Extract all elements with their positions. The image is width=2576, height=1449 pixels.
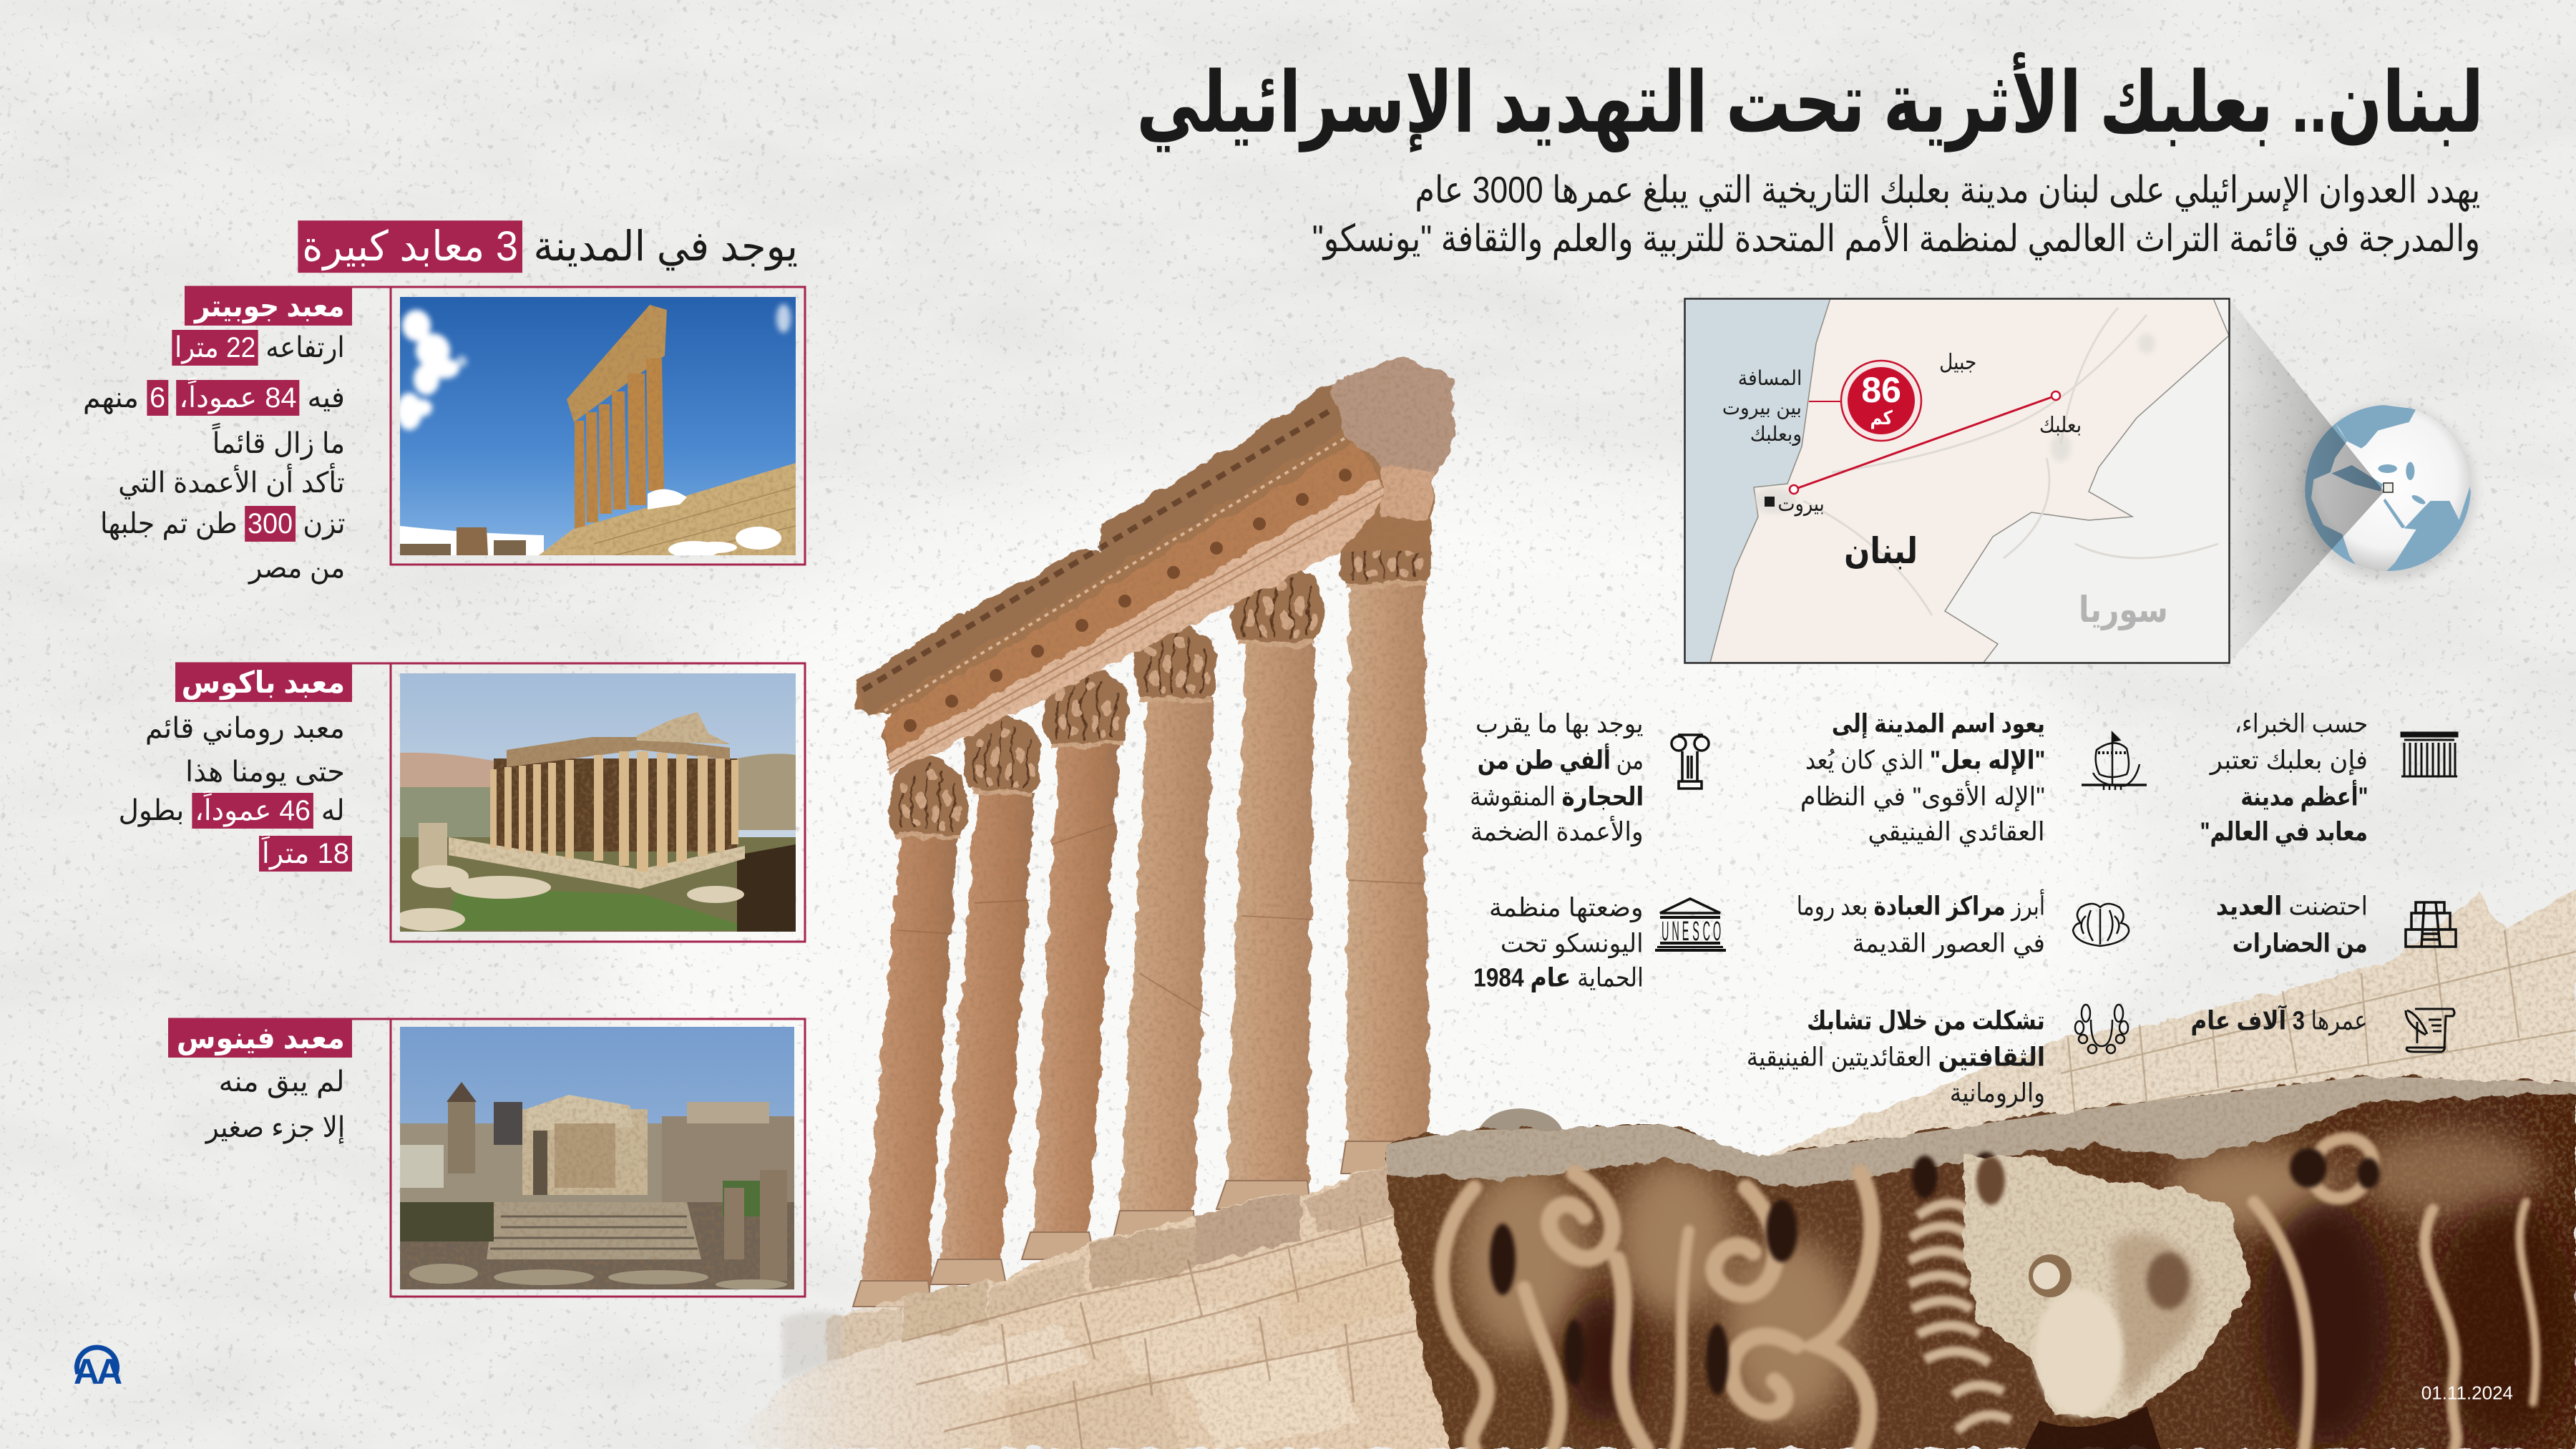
globe — [2229, 298, 2475, 663]
Bacchus text block: معبد روماني قائم — [145, 713, 345, 744]
photo panel: Temple of Bacchus — [175, 663, 805, 942]
Jupiter text block: ارتفاعه 22 مترا — [175, 332, 345, 364]
fact: civilizations — [2204, 887, 2368, 962]
Jupiter text block: فيه 84 عموداً، 6 منهم — [83, 382, 345, 414]
fact: cultures: تشكلت من خلال تشابك — [1807, 1005, 2045, 1035]
photo illustration: columns of the Temple of Jupiter — [716, 356, 2576, 1449]
Bacchus text block: حتى يومنا هذا — [185, 756, 345, 788]
connector cone from map to globe — [2229, 298, 2384, 663]
icon: palmette — [2073, 904, 2129, 946]
Bacchus text block: 18 متراً — [262, 838, 349, 869]
fact: stone weight: يوجد بها ما يقرب — [1475, 708, 1644, 738]
column bases — [853, 1141, 1433, 1307]
subtitle — [1312, 170, 2480, 260]
Venus text block — [168, 1019, 352, 1148]
fact: UNESCO protection: وضعتها منظمة — [1489, 892, 1644, 922]
lion mane — [1909, 1204, 2011, 1431]
icon: ionic column — [1672, 735, 1709, 789]
label: Venus — [168, 1019, 352, 1058]
fact: greatest temples: معابد في العالم" — [2200, 816, 2368, 846]
brand logo: Anadolu Agency: AA — [74, 1352, 122, 1392]
fact: name origin — [1789, 708, 2046, 848]
Jupiter text block: ما زال قائماً — [213, 428, 345, 459]
label: Jupiter — [185, 287, 352, 326]
fact: cultures: والرومانية — [1950, 1078, 2045, 1107]
fact: civilizations: احتضنت العديد — [2216, 891, 2368, 920]
icon: phoenician ship — [2082, 733, 2147, 790]
Jupiter text block: معبد جوبيتر — [195, 289, 345, 323]
fact: greatest temples: فإن بعلبك تعتبر — [2210, 745, 2368, 774]
icon: ziggurat — [2406, 902, 2456, 947]
fact: age: عمرها 3 آلاف عام — [2191, 1005, 2368, 1035]
fact: civilizations: من الحضارات — [2233, 928, 2368, 957]
section heading: three temples: يوجد في المدينة 3 معابد كبيرة — [302, 223, 798, 270]
Venus text block: إلا جزء صغير — [205, 1112, 345, 1143]
Jupiter text block — [86, 287, 352, 591]
fact: cultures — [1739, 1002, 2046, 1113]
icon: temple colonnade — [2401, 733, 2457, 776]
distance badge — [1841, 361, 1921, 441]
subtitle: والمدرجة في قائمة التراث العالمي لمنظمة الأمم المتحدة للتربية والعلم والثقافة "يونسكو" — [1312, 218, 2480, 260]
photo panel: Temple of Jupiter — [185, 287, 805, 565]
icon: wreath — [2075, 1005, 2128, 1053]
capitals — [889, 513, 1432, 839]
map labels: لبنان — [1844, 531, 1918, 571]
fact: center of worship: في العصور القديمة — [1853, 928, 2045, 957]
map labels: المسافة — [1737, 367, 1802, 389]
fact: UNESCO protection: الحماية عام 1984 — [1473, 962, 1644, 992]
carved block with lion head — [1386, 1073, 2576, 1449]
Jupiter text block: من مصر — [249, 552, 345, 584]
fact: greatest temples: حسب الخبراء، — [2235, 708, 2368, 738]
title: لبنان.. بعلبك الأثرية تحت التهديد الإسرائيلي — [1136, 56, 2484, 150]
fact: center of worship — [1789, 887, 2046, 962]
sea — [1684, 298, 1830, 663]
Venus text block: معبد فينوس — [177, 1021, 345, 1055]
fact: center of worship: أبرز مراكز العبادة بعد روما — [1797, 891, 2045, 920]
Venus text block: لم يبق منه — [219, 1066, 345, 1098]
fact: name origin: "الإله الأقوى" في النظام — [1800, 781, 2045, 811]
fact: name origin: "الإله بعل" الذي كان يُعد — [1805, 745, 2045, 774]
icon: UNESCO temple: UNESCO — [1662, 917, 1721, 947]
map labels: كم — [1870, 407, 1893, 429]
fact: UNESCO protection: اليونسكو تحت — [1501, 928, 1644, 957]
map labels: بيروت — [1778, 492, 1825, 516]
fact: name origin: يعود اسم المدينة إلى — [1832, 708, 2045, 738]
fact: stone weight: والأعمدة الضخمة — [1470, 816, 1644, 846]
map labels: وبعلبك — [1750, 423, 1802, 445]
Jupiter text block: تزن 300 طن تم جلبها — [99, 508, 345, 540]
locator map: Lebanon — [1684, 298, 2384, 663]
date: 01.11.2024 — [2421, 1382, 2513, 1403]
back wall of pale blocks — [1746, 887, 2576, 1174]
icon: scroll and quill — [2406, 1009, 2454, 1052]
fact: UNESCO protection — [1460, 887, 1646, 998]
lion head — [1964, 1156, 2250, 1418]
distance line Beirut to Baalbek — [1790, 391, 2060, 494]
map labels: بين بيروت — [1722, 396, 1802, 419]
fact: name origin: العقائدي الفينيقي — [1868, 816, 2045, 846]
map labels — [1684, 298, 2229, 663]
pedestals — [828, 1163, 1410, 1449]
fact: stone weight: الحجارة المنقوشة — [1470, 781, 1644, 811]
map labels: بعلبك — [2039, 414, 2082, 437]
Lebanon territory — [1710, 298, 2229, 663]
fact: stone weight: من ألفي طن من — [1478, 745, 1644, 774]
Bacchus text block: له 46 عموداً، بطول — [119, 795, 345, 826]
map labels: 86 — [1861, 370, 1901, 410]
subtitle: يهدد العدوان الإسرائيلي على لبنان مدينة بعلبك التاريخية التي يبلغ عمرها 3000 عام — [1415, 170, 2480, 211]
stone base wall — [716, 1138, 1503, 1449]
column shafts — [861, 582, 1430, 1289]
photo panel: Temple of Venus — [168, 1019, 805, 1297]
fact: greatest temples — [2204, 708, 2368, 848]
map labels: سوريا — [2079, 590, 2168, 630]
fact: greatest temples: "أعظم مدينة — [2240, 781, 2368, 811]
Beirut marker — [1765, 497, 1775, 507]
map labels: جبيل — [1939, 351, 1976, 374]
Bacchus text block: معبد باكوس — [182, 665, 345, 699]
entablature — [855, 356, 1454, 776]
fact: stone weight — [1460, 708, 1646, 848]
Jupiter text block: تأكد أن الأعمدة التي — [118, 467, 345, 499]
mid tones — [1460, 1131, 2540, 1424]
label: Bacchus — [175, 663, 352, 702]
fact: cultures: الثقافتين العقائديتين الفينيقية — [1747, 1042, 2045, 1071]
icon: UNESCO temple — [1655, 899, 1726, 952]
Bacchus text block — [114, 663, 352, 874]
